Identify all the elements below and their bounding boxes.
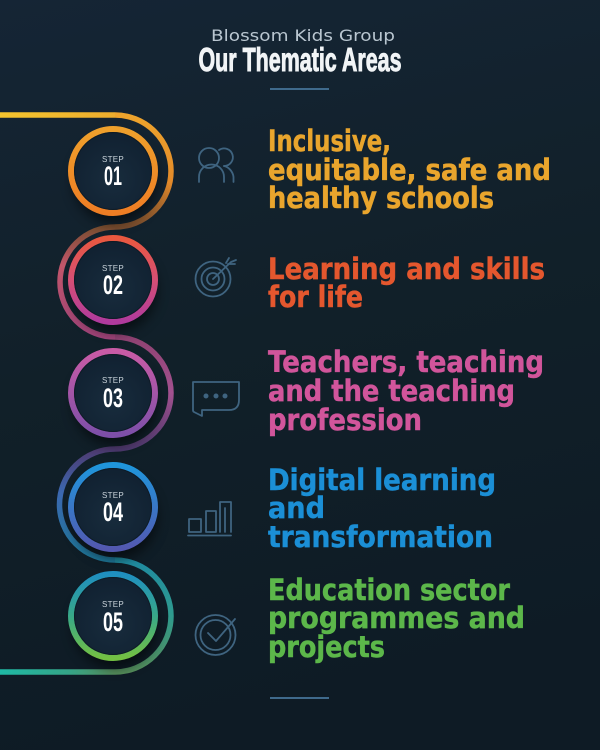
step 2 badge: STEP: [102, 264, 124, 273]
step 3 badge: [71, 351, 157, 445]
step 2 badge: 02: [103, 270, 123, 300]
step 4 badge: STEP: [102, 491, 124, 500]
heading: step 5: Education sector: [268, 573, 511, 607]
icon: target: [196, 258, 236, 296]
heading: step 4: transformation: [268, 520, 493, 554]
heading: step 3: profession: [268, 403, 422, 437]
step 2 badge: [71, 238, 157, 332]
heading: step 5: projects: [268, 630, 385, 664]
step 5 badge: STEP: [102, 600, 124, 609]
heading: step 3: and the teaching: [268, 374, 515, 408]
connecting ribbon path: [0, 115, 171, 672]
heading: step 5: programmes and: [268, 601, 525, 635]
heading: step 1: Inclusive,: [268, 124, 391, 158]
icon: chat bubble: [193, 382, 239, 416]
step 1 badge: [71, 129, 157, 223]
heading: step 3: Teachers, teaching: [268, 345, 544, 379]
heading: step 5: [268, 573, 525, 664]
heading: step 3: [268, 345, 544, 437]
step 3 badge: STEP: [102, 376, 124, 385]
heading: step 2: Learning and skills: [268, 252, 545, 286]
organisation name: Blossom Kids Group: [211, 26, 395, 45]
heading: step 4: and: [268, 491, 325, 525]
step 5 badge: 05: [103, 607, 123, 637]
step 5 badge: [71, 574, 157, 668]
heading: step 1: healthy schools: [268, 181, 494, 215]
icon: check circle: [196, 615, 236, 655]
heading: step 4: Digital learning: [268, 463, 496, 497]
heading: step 1: equitable, safe and: [268, 153, 551, 187]
heading: step 2: [268, 252, 545, 314]
heading: step 2: for life: [268, 280, 363, 314]
step 3 badge: 03: [103, 383, 123, 413]
title underline: [270, 88, 329, 90]
step 4 badge: [71, 465, 157, 559]
icon: bar chart: [188, 502, 231, 536]
header: [198, 26, 402, 78]
title: Our Thematic Areas: [198, 41, 402, 78]
step 4 badge: 04: [103, 497, 123, 527]
heading: step 1: [268, 124, 551, 215]
icon: people: [199, 148, 234, 182]
heading: step 4: [268, 463, 496, 554]
footer divider: [270, 697, 329, 699]
step 1 badge: 01: [104, 161, 122, 191]
step 1 badge: STEP: [102, 155, 124, 164]
